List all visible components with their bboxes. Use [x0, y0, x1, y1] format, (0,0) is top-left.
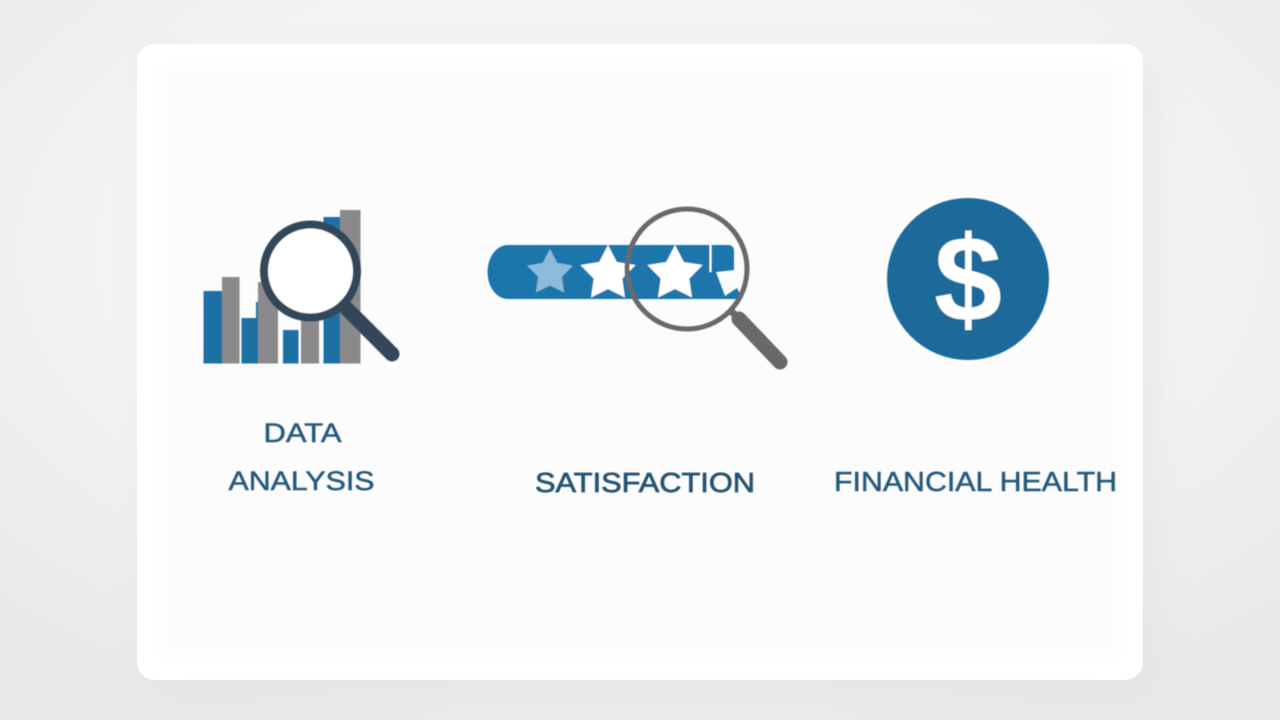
label: satisfaction: SATISFACTION: [535, 467, 755, 498]
panel: card: [137, 44, 1156, 698]
icon: dollar coin: [887, 198, 1049, 360]
label: data analysis: DATA: [264, 418, 342, 448]
label: data analysis: ANALYSIS: [228, 466, 374, 496]
star 1: [527, 249, 573, 292]
icon: magnifying glass, gray: [627, 209, 780, 362]
icon: magnifying glass, dark: [264, 224, 392, 354]
icon: star rating bar with magnifying glass: [488, 209, 780, 362]
label: data analysis: [228, 418, 374, 496]
star 4 highlight: [710, 245, 712, 272]
star 2: [580, 245, 636, 298]
icon: dollar coin: $: [934, 211, 1002, 347]
bar chart: [204, 210, 360, 364]
rating bar: [488, 245, 741, 299]
star 3: [647, 245, 703, 298]
label: financial health: FINANCIAL HEALTH: [834, 466, 1117, 497]
icon: bar chart with magnifying glass: [204, 210, 392, 364]
